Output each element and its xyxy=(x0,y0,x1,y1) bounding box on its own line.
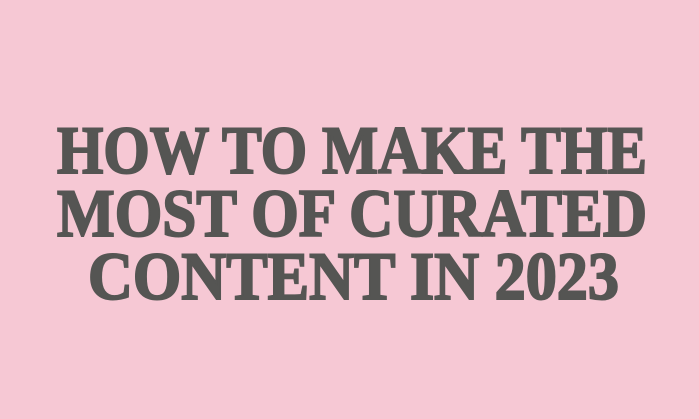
title: CONTENT IN 2023 xyxy=(88,238,619,314)
title: MOST OF CURATED xyxy=(57,175,647,251)
